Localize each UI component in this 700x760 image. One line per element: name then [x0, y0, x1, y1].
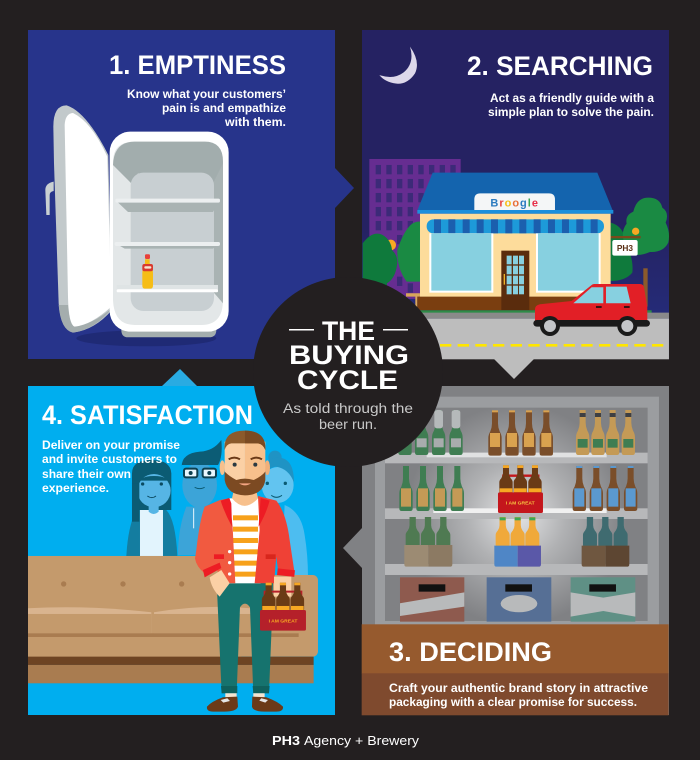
text: satisfaction description: experience. [42, 483, 109, 495]
title: THE [322, 316, 375, 346]
arrow: deciding to satisfaction [343, 528, 362, 568]
person: left woman [126, 460, 177, 556]
text: satisfaction description: and invite customers to [42, 454, 177, 466]
trees left [363, 222, 420, 293]
arrow: searching to deciding [494, 359, 534, 379]
bottles: row 2 [399, 466, 637, 511]
illustration: customers with man on couch [28, 431, 318, 712]
bottles: row 1 [398, 410, 635, 456]
panel: 4. Satisfaction [28, 369, 335, 715]
title: BUYING [289, 340, 409, 370]
illustration: storefront street scene [363, 47, 669, 359]
icon: yellow bottle [142, 254, 153, 289]
footer: PH3 Agency + Brewery: Agency + Brewery [304, 733, 420, 748]
text: searching description [488, 93, 655, 119]
panel: 1. Emptiness [28, 30, 354, 359]
text: searching description: Act as a friendly guide with a [490, 93, 655, 105]
six-pack in hand: I AM GREAT [269, 618, 297, 624]
title: CYCLE [297, 365, 398, 395]
arrow: emptiness to searching [335, 168, 354, 208]
subtitle: beer run. [319, 417, 377, 432]
boxes: bottom shelf [400, 577, 635, 622]
heading: 2. SEARCHING: 2. SEARCHING [467, 51, 653, 81]
title [289, 316, 409, 395]
text: satisfaction description: Deliver on your promise [42, 440, 180, 452]
six-pack: I AM GREAT [498, 465, 543, 513]
text: satisfaction description: share their own [42, 469, 131, 481]
socks and shoes [225, 693, 265, 699]
text: emptiness description: Know what your customers’ [127, 89, 286, 101]
illustration: beer cooler shelves [362, 397, 669, 715]
icon: PH3 hanging sign [611, 236, 641, 256]
person: man with glasses [178, 440, 222, 555]
road [363, 310, 669, 359]
footer: PH3 Agency + Brewery: PH3 [272, 733, 300, 748]
icon: Broogle shop [417, 173, 613, 310]
tree right [623, 198, 669, 307]
neck and head [232, 483, 258, 506]
subtitle [283, 401, 413, 432]
six-pack: I AM GREAT: I AM GREAT [506, 500, 535, 506]
jacket [195, 498, 235, 583]
heading: 1. EMPTINESS: 1. EMPTINESS [109, 50, 286, 80]
text: deciding description [389, 683, 648, 709]
text: emptiness description: pain is and empathize [162, 103, 286, 115]
hand [210, 570, 230, 597]
heading: 4. SATISFACTION: 4. SATISFACTION [42, 400, 253, 430]
text: emptiness description [127, 89, 286, 129]
icon: open empty fridge [45, 105, 229, 346]
heading: 3. DECIDING: 3. DECIDING [389, 637, 552, 667]
text: satisfaction description [42, 440, 180, 495]
pants [217, 582, 273, 693]
icon: red car [533, 284, 650, 336]
tree behind shop right [611, 223, 633, 281]
subtitle: As told through the [283, 401, 413, 416]
center badge: The Buying Cycle [253, 277, 443, 467]
six-pack in hand [260, 577, 306, 631]
icon: Broogle shop: Broogle [490, 197, 539, 209]
arrow: satisfaction to emptiness [162, 369, 197, 386]
icon: PH3 hanging sign: PH3 [617, 243, 633, 253]
shirt [229, 498, 261, 583]
icon: crescent moon [379, 47, 417, 84]
person: right woman [261, 451, 308, 577]
text: deciding description: Craft your authentic brand story in attractive [389, 683, 648, 695]
footer band [362, 624, 669, 674]
bench [406, 293, 420, 307]
text: deciding description: packaging with a clear promise for success. [389, 697, 637, 709]
text: searching description: simple plan to solve the pain. [488, 107, 654, 119]
icon: couch [28, 556, 318, 683]
panel: 2. Searching [362, 30, 669, 379]
panel: 3. Deciding [343, 386, 669, 715]
text: emptiness description: with them. [224, 117, 286, 129]
person: hipster man with six-pack [195, 431, 306, 712]
icon: purple building [369, 159, 461, 299]
six-packs: row 3 [404, 517, 629, 567]
